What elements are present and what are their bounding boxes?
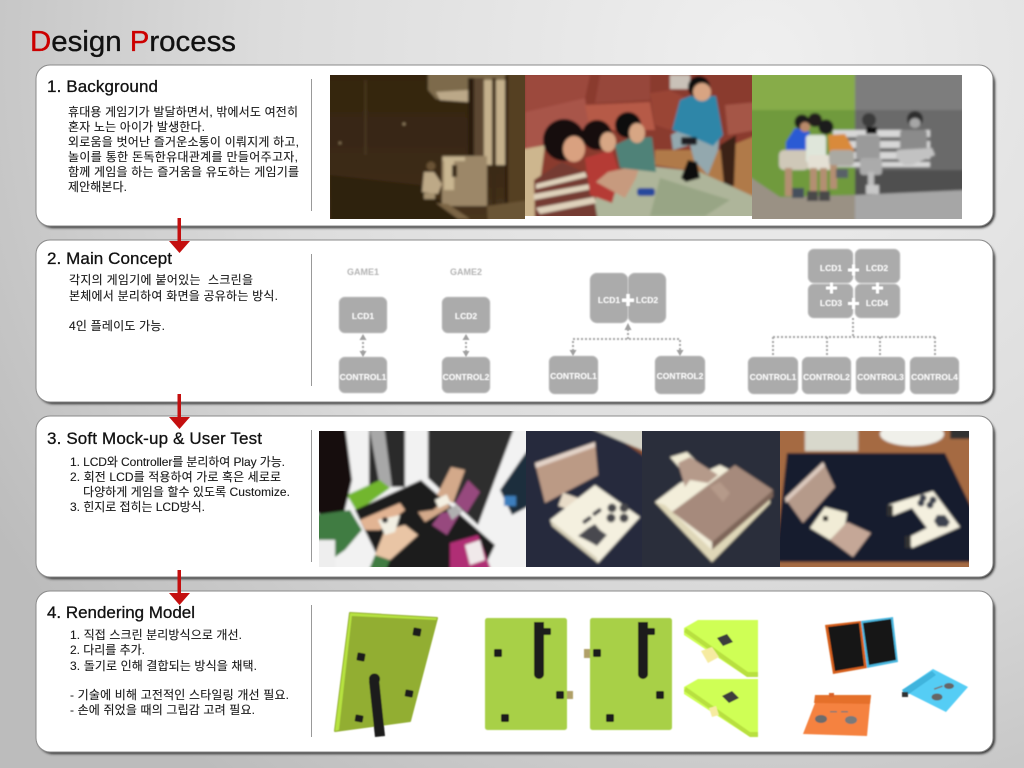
text block: background description <box>68 105 299 194</box>
heading: soft mock-up: 3. Soft Mock-up & User Test <box>47 429 262 448</box>
diagram: two controllers sharing a combined screen: CONTROL1 <box>550 371 597 381</box>
text block: background description: 함께 게임을 하는 즐거움을 유도하는 게임기를 <box>68 165 299 179</box>
diagram: two controllers sharing a combined screen: LCD1 <box>598 295 620 305</box>
arrow: background to main concept <box>169 218 190 253</box>
text block: rendering notes: 1. 직접 스크린 분리방식으로 개선. <box>70 628 242 642</box>
diagram: separate games: CONTROL2 <box>443 372 490 382</box>
photo: mock-up with raised screen <box>526 431 642 567</box>
panel: main concept <box>36 240 995 404</box>
render: tilted screen with stand <box>335 613 437 737</box>
diagram: separate games: LCD1 <box>352 311 374 321</box>
panel: rendering model <box>36 591 995 754</box>
text block: main concept description <box>69 273 278 333</box>
photo: user testing the mock-up <box>319 431 526 567</box>
diagram: two controllers sharing a combined screen: CONTROL2 <box>657 371 704 381</box>
title: Design Process <box>30 26 236 58</box>
render: joined dual screens <box>825 617 898 674</box>
diagram: four controllers sharing four screens: CONTROL3 <box>857 372 904 382</box>
text block: rendering notes: 3. 돌기로 인해 결합되는 방식을 채택. <box>70 659 257 673</box>
diagram: separate games: CONTROL1 <box>340 372 387 382</box>
text block: mock-up notes: 1. LCD와 Controller를 분리하여 Play 가능. <box>70 455 285 469</box>
render: orange controller <box>803 693 871 736</box>
diagram: two controllers sharing a combined screen: LCD2 <box>636 295 658 305</box>
diagram: four controllers sharing four screens: LCD1 <box>820 263 842 273</box>
text block: mock-up notes: 다양하게 게임을 할수 있도록 Customize. <box>83 485 290 499</box>
render: blue controller <box>902 669 968 712</box>
diagram: separate games: GAME1 <box>347 267 379 277</box>
photo: four children playing a console together <box>525 75 752 216</box>
photo: child alone at a street arcade machine <box>330 75 525 219</box>
diagram: separate games <box>339 267 490 393</box>
arrow: mock-up to rendering <box>169 570 190 605</box>
text block: background description: 제안해본다. <box>68 180 127 194</box>
text block: main concept description: 본체에서 분리하여 화면을 공유하는 방식. <box>69 289 278 303</box>
photo: mock-up folded flat <box>642 431 780 567</box>
diagram: four controllers sharing four screens: LCD2 <box>866 263 888 273</box>
diagram: four controllers sharing four screens: CONTROL4 <box>911 372 958 382</box>
text block: rendering notes: - 손에 쥐었을 때의 그립감 고려 필요. <box>70 703 255 717</box>
text block: mock-up notes: 3. 힌지로 접히는 LCD방식. <box>70 500 205 514</box>
photo: children sharing a game on a bench <box>752 75 962 219</box>
text block: main concept description: 4인 플레이도 가능. <box>69 319 165 333</box>
render: back of screen with right tab <box>485 618 573 730</box>
render: back of screen with left tab <box>584 618 672 730</box>
panel: background <box>36 65 995 228</box>
text block: rendering notes <box>70 628 289 717</box>
render: close-up of extended connector <box>684 620 758 677</box>
diagram: four controllers sharing four screens: LCD4 <box>866 298 888 308</box>
text block: background description: 휴대용 게임기가 발달하면서, 밖에서도 여전히 <box>68 105 298 119</box>
render: close-up of retracted connector <box>684 679 758 737</box>
text block: main concept description: 각지의 게임기에 붙어있는 스크린을 <box>69 273 253 287</box>
heading: rendering model: 4. Rendering Model <box>47 603 195 622</box>
diagram: two controllers sharing a combined screen <box>549 273 705 394</box>
panel: soft mock-up and user test <box>36 416 995 579</box>
text block: mock-up notes: 2. 회전 LCD를 적용하여 가로 혹은 세로로 <box>70 470 281 484</box>
diagram: separate games: GAME2 <box>450 267 482 277</box>
diagram: four controllers sharing four screens <box>748 249 959 394</box>
text block: background description: 외로움을 벗어난 즐거운소통이 이뤄지게 하고, <box>68 135 299 149</box>
text block: rendering notes: 2. 다리를 추가. <box>70 643 145 657</box>
arrow: main concept to mock-up <box>169 394 190 429</box>
diagram: four controllers sharing four screens: CONTROL1 <box>750 372 797 382</box>
text block: background description: 놀이를 통한 돈독한유대관계를 만들어주고자, <box>68 150 298 164</box>
text block: mock-up notes <box>70 455 290 514</box>
text block: rendering notes: - 기술에 비해 고전적인 스타일링 개선 필요. <box>70 688 289 702</box>
diagram: four controllers sharing four screens: LCD3 <box>820 298 842 308</box>
heading: background: 1. Background <box>47 77 158 96</box>
diagram: four controllers sharing four screens: CONTROL2 <box>803 372 850 382</box>
diagram: separate games: LCD2 <box>455 311 477 321</box>
text block: background description: 혼자 노는 아이가 발생한다. <box>68 120 205 134</box>
heading: main concept: 2. Main Concept <box>47 249 172 268</box>
photo: separated mock-up on dark mat <box>780 431 969 567</box>
